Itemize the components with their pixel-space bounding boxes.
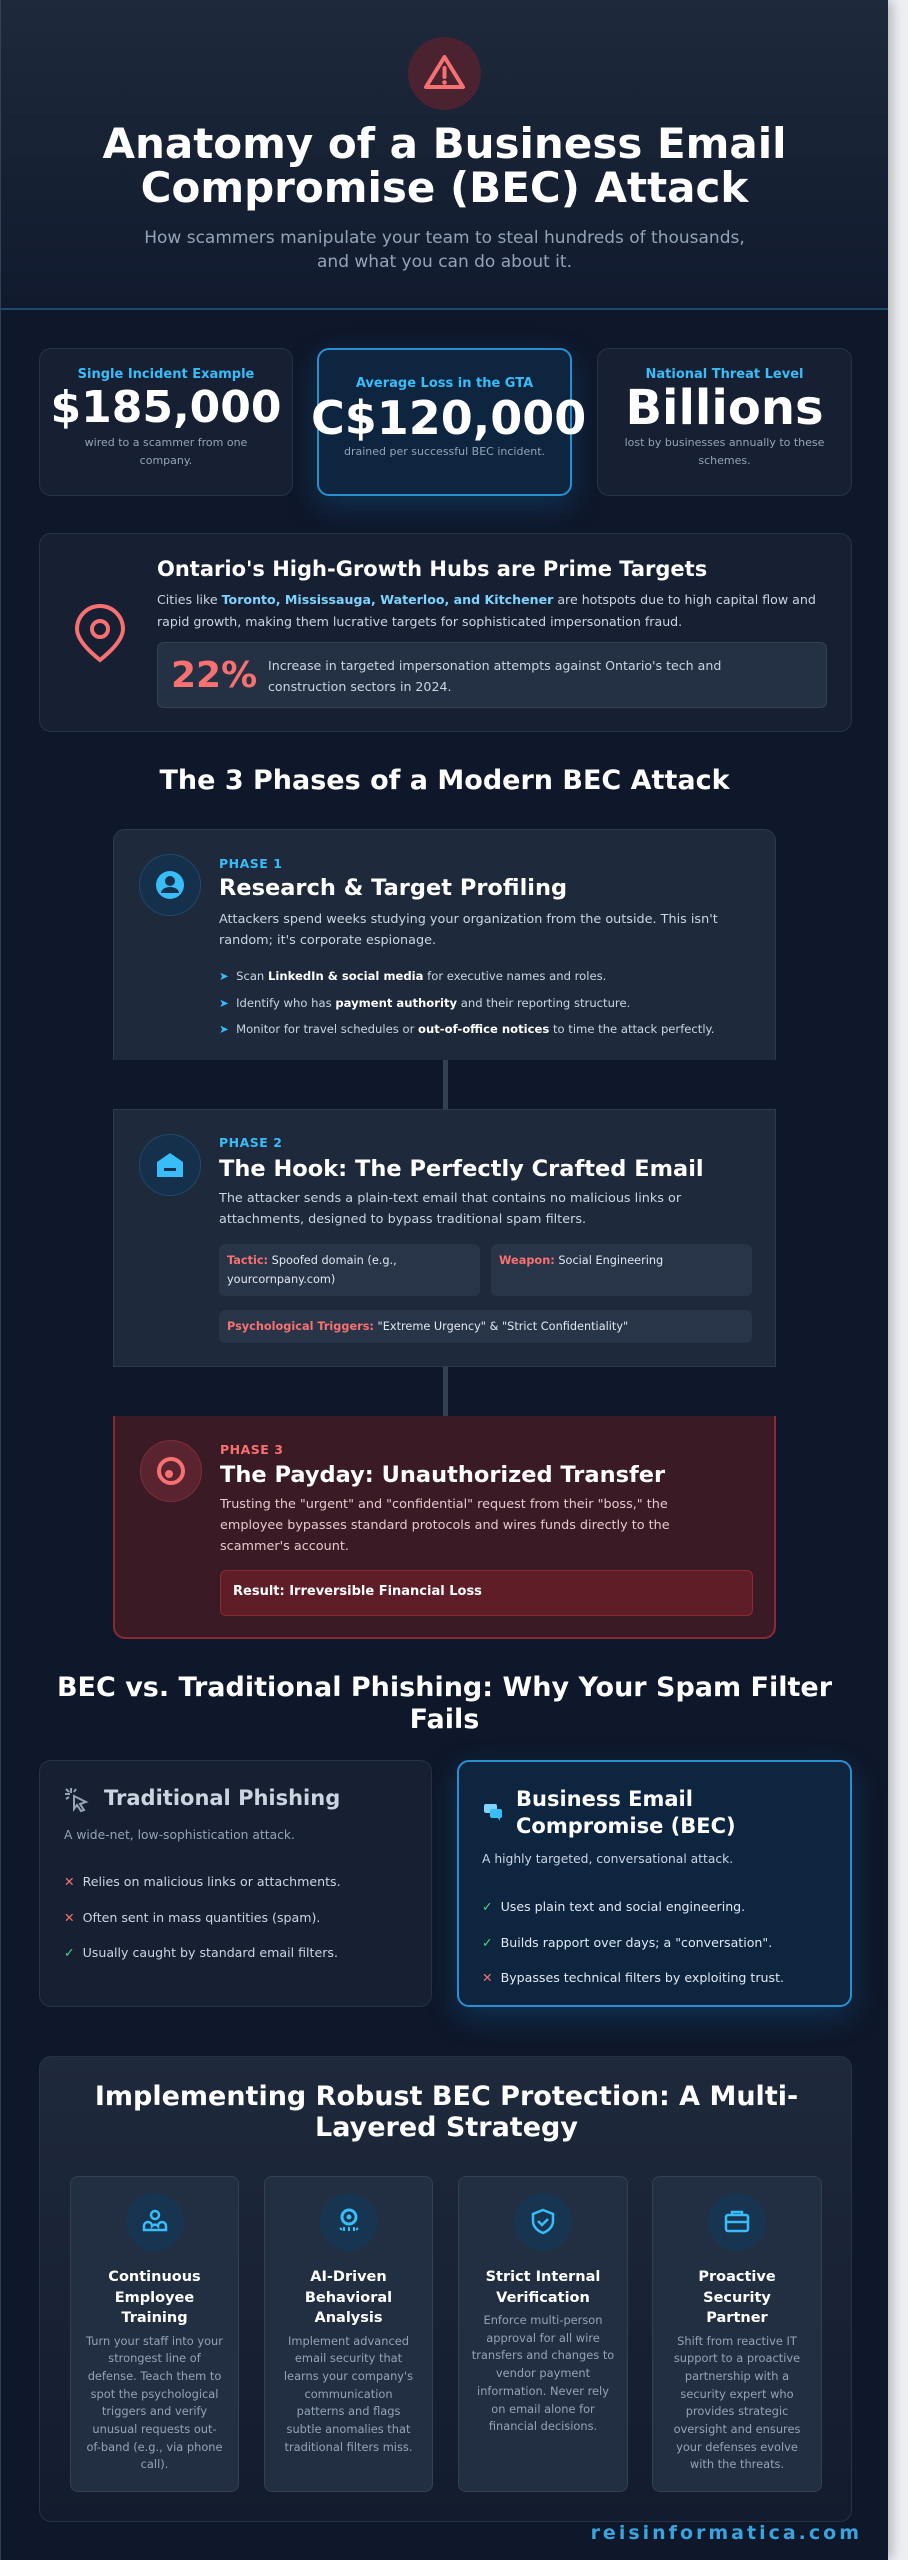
panel: BEC bbox=[457, 1760, 852, 2007]
stat card 2: C$120,000 bbox=[311, 391, 586, 445]
stat card 3 bbox=[597, 348, 852, 496]
tag: weapon bbox=[491, 1244, 752, 1296]
stat card 1 bbox=[39, 348, 293, 496]
card: training: Employee bbox=[115, 2290, 194, 2306]
tag: weapon: Weapon: Social Engineering bbox=[499, 1254, 663, 1267]
card: partner: Partner bbox=[706, 2310, 768, 2326]
stat card 3: National Threat Level bbox=[646, 367, 803, 382]
panel: protection bbox=[39, 2056, 852, 2522]
list: ✓ Builds rapport over days; a "conversation". bbox=[482, 1934, 772, 1950]
heading: Ontario's High-Growth Hubs are Prime Targets bbox=[157, 557, 707, 581]
tag: tactic bbox=[219, 1244, 480, 1296]
list: ✕ Relies on malicious links or attachments. bbox=[64, 1874, 341, 1889]
heading: comparison: BEC vs. Traditional Phishing: Why Your Spam Filter Fails bbox=[57, 1672, 832, 1735]
tag: triggers bbox=[219, 1310, 752, 1343]
subtitle: and what you can do about it. bbox=[317, 252, 572, 272]
heading: Business Email bbox=[516, 1787, 693, 1811]
icon: inbox bbox=[139, 1134, 201, 1196]
icon: target bbox=[140, 1440, 202, 1502]
bullets: ➤ Monitor for travel schedules or out-of-office notices to time the attack perfectly. bbox=[219, 1022, 714, 1036]
stat box 22%: 22% bbox=[171, 655, 257, 696]
card: verification: Strict Internal bbox=[486, 2269, 600, 2285]
result box: Result: Irreversible Financial Loss bbox=[233, 1584, 482, 1599]
card: partner bbox=[652, 2176, 822, 2492]
stat card 1: $185,000 bbox=[50, 382, 282, 433]
bullets: ➤ Scan LinkedIn & social media for executive names and roles. bbox=[219, 969, 606, 983]
stat card 3: Billions bbox=[625, 380, 824, 436]
card: partner: Security bbox=[703, 2290, 771, 2306]
arrow: phase 1 to 2 bbox=[443, 1060, 448, 1109]
text: Trusting the "urgent" and "confidential" request from their "boss," the employee bypasses standard protocols and wires funds directly to the scammer's account. bbox=[220, 1497, 670, 1554]
stat card 2: Average Loss in the GTA bbox=[356, 376, 533, 391]
title: Research & Target Profiling bbox=[219, 875, 567, 901]
header bbox=[1, 0, 888, 310]
card: partner: Proactive bbox=[698, 2269, 776, 2285]
title: Anatomy of a Business Email bbox=[102, 119, 787, 168]
text: Attackers spend weeks studying your organization from the outside. This isn't random; it's corporate espionage. bbox=[219, 912, 718, 948]
icon: shield bbox=[514, 2193, 572, 2251]
list bbox=[482, 1899, 784, 1985]
stat card 1: wired to a scammer from one company. bbox=[85, 436, 247, 467]
footer: brand: reisinformatica.com bbox=[591, 2522, 862, 2544]
title: The Hook: The Perfectly Crafted Email bbox=[219, 1156, 704, 1182]
text: The attacker sends a plain-text email that contains no malicious links or attachments, designed to bypass traditional spam filters. bbox=[219, 1191, 681, 1227]
card: AI: Behavioral bbox=[305, 2290, 392, 2306]
subtitle bbox=[144, 228, 745, 272]
bullets bbox=[219, 969, 714, 1036]
card: partner: Shift from reactive IT support to a proactive partnership with a security expert who provides strategic oversight and ensures your defenses evolve with the threats. bbox=[674, 2334, 800, 2471]
list: ✓ Usually caught by standard email filters. bbox=[64, 1945, 338, 1960]
card: training bbox=[70, 2176, 239, 2492]
title: Compromise (BEC) Attack bbox=[141, 163, 748, 212]
stat card 1: Single Incident Example bbox=[78, 367, 254, 382]
text: Cities like Toronto, Mississauga, Waterloo, and Kitchener are hotspots due to high capital flow and rapid growth, making them lucrative targets for sophisticated impersonation fraud. bbox=[157, 592, 816, 629]
card: AI: Analysis bbox=[314, 2310, 382, 2326]
icon: people bbox=[126, 2193, 184, 2251]
subtitle: A wide-net, low-sophistication attack. bbox=[64, 1828, 295, 1842]
card: AI: Implement advanced email security that learns your company's communication patterns and flags subtle anomalies that traditional filters miss. bbox=[284, 2334, 413, 2454]
icon: user bbox=[139, 854, 201, 916]
card: training: Continuous bbox=[108, 2269, 201, 2285]
title bbox=[102, 119, 787, 212]
phase label: PHASE 2 bbox=[219, 1135, 282, 1150]
title: The Payday: Unauthorized Transfer bbox=[220, 1462, 665, 1488]
list: ✓ Uses plain text and social engineering. bbox=[482, 1899, 745, 1914]
tag: tactic: Tactic: Spoofed domain (e.g., yourcornpany.com) bbox=[227, 1254, 397, 1286]
list: ✕ Often sent in mass quantities (spam). bbox=[64, 1910, 320, 1924]
arrow: phase 2 to 3 bbox=[443, 1367, 448, 1416]
list bbox=[64, 1874, 341, 1960]
stat card 2: drained per successful BEC incident. bbox=[344, 445, 545, 458]
icon: chat bbox=[484, 1804, 502, 1821]
phase label: PHASE 3 bbox=[220, 1442, 283, 1457]
icon: briefcase bbox=[708, 2193, 766, 2251]
panel: traditional phishing bbox=[39, 1760, 432, 2007]
subtitle: A highly targeted, conversational attack. bbox=[482, 1852, 733, 1866]
card: AI bbox=[264, 2176, 433, 2492]
heading bbox=[516, 1787, 736, 1838]
icon: warning bbox=[408, 37, 481, 110]
icon: brain bbox=[320, 2193, 378, 2251]
stat box 22% bbox=[157, 642, 827, 708]
bullets: ➤ Identify who has payment authority and their reporting structure. bbox=[219, 996, 630, 1010]
heading: Compromise (BEC) bbox=[516, 1814, 736, 1838]
panel: Ontario bbox=[39, 533, 852, 732]
result box bbox=[220, 1570, 753, 1616]
stat card 2 bbox=[317, 348, 572, 496]
card: training: Turn your staff into your strongest line of defense. Teach them to spot the psychological triggers and verify unusual requests out-of-band (e.g., via phone call). bbox=[86, 2334, 223, 2471]
icon: cursor click bbox=[65, 1788, 88, 1812]
icon: map pin bbox=[75, 604, 125, 662]
list: ✕ Bypasses technical filters by exploiting trust. bbox=[482, 1970, 784, 1985]
heading: Traditional Phishing bbox=[104, 1786, 340, 1810]
card: verification: Verification bbox=[496, 2290, 590, 2306]
card: AI: AI-Driven bbox=[310, 2269, 387, 2285]
card: verification bbox=[458, 2176, 628, 2492]
stat card 3: lost by businesses annually to these schemes. bbox=[625, 436, 824, 467]
phase 3 card bbox=[113, 1416, 776, 1639]
phase label: PHASE 1 bbox=[219, 856, 282, 871]
heading: phases: The 3 Phases of a Modern BEC Attack bbox=[159, 765, 730, 796]
heading: Implementing Robust BEC Protection: A Multi-Layered Strategy bbox=[95, 2081, 798, 2143]
stat box 22%: Increase in targeted impersonation attempts against Ontario's tech and construction sectors in 2024. bbox=[268, 658, 721, 694]
phase 1 card bbox=[113, 829, 776, 1060]
card: verification: Enforce multi-person approval for all wire transfers and changes to vendor payment information. Never rely on email alone for financial decisions. bbox=[472, 2313, 614, 2433]
tag: triggers: Psychological Triggers: "Extreme Urgency" & "Strict Confidentiality" bbox=[227, 1320, 628, 1333]
card: training: Training bbox=[121, 2310, 188, 2326]
phase 2 card bbox=[113, 1109, 776, 1367]
subtitle: How scammers manipulate your team to steal hundreds of thousands, bbox=[144, 228, 745, 248]
